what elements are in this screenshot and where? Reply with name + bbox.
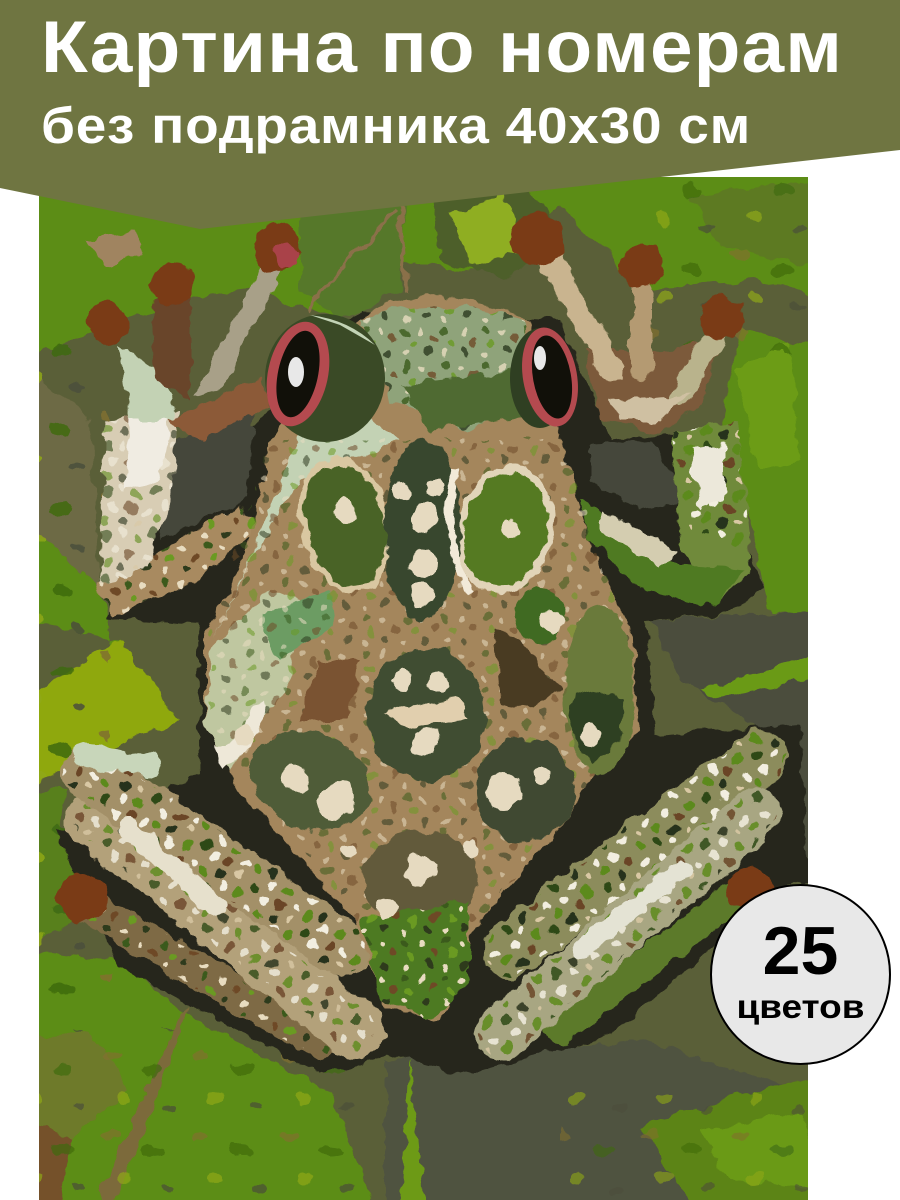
right toes xyxy=(512,212,564,264)
right eye xyxy=(510,328,550,428)
painting: frog on a leaf xyxy=(39,177,808,1200)
header banner xyxy=(0,0,900,229)
frog: front legs xyxy=(87,212,752,615)
left hind leg xyxy=(85,905,320,1042)
right front arm xyxy=(588,440,678,510)
frog: body xyxy=(205,297,638,1020)
markings xyxy=(296,454,390,594)
left toes xyxy=(87,302,129,344)
title: Картина по номерам xyxy=(41,7,843,88)
badge: 25 colours: 25 xyxy=(763,913,838,989)
spots xyxy=(236,478,600,918)
badge: 25 colours: цветов xyxy=(737,988,864,1025)
left eye xyxy=(265,314,385,442)
frog: eyes xyxy=(258,314,585,442)
left front arm xyxy=(160,410,255,540)
subtitle: без подрамника 40х30 см xyxy=(41,97,751,154)
badge: 25 colours xyxy=(710,884,891,1065)
frog: hind legs xyxy=(57,755,773,1042)
right hind leg xyxy=(560,888,745,1030)
frog shadow xyxy=(55,310,808,1075)
